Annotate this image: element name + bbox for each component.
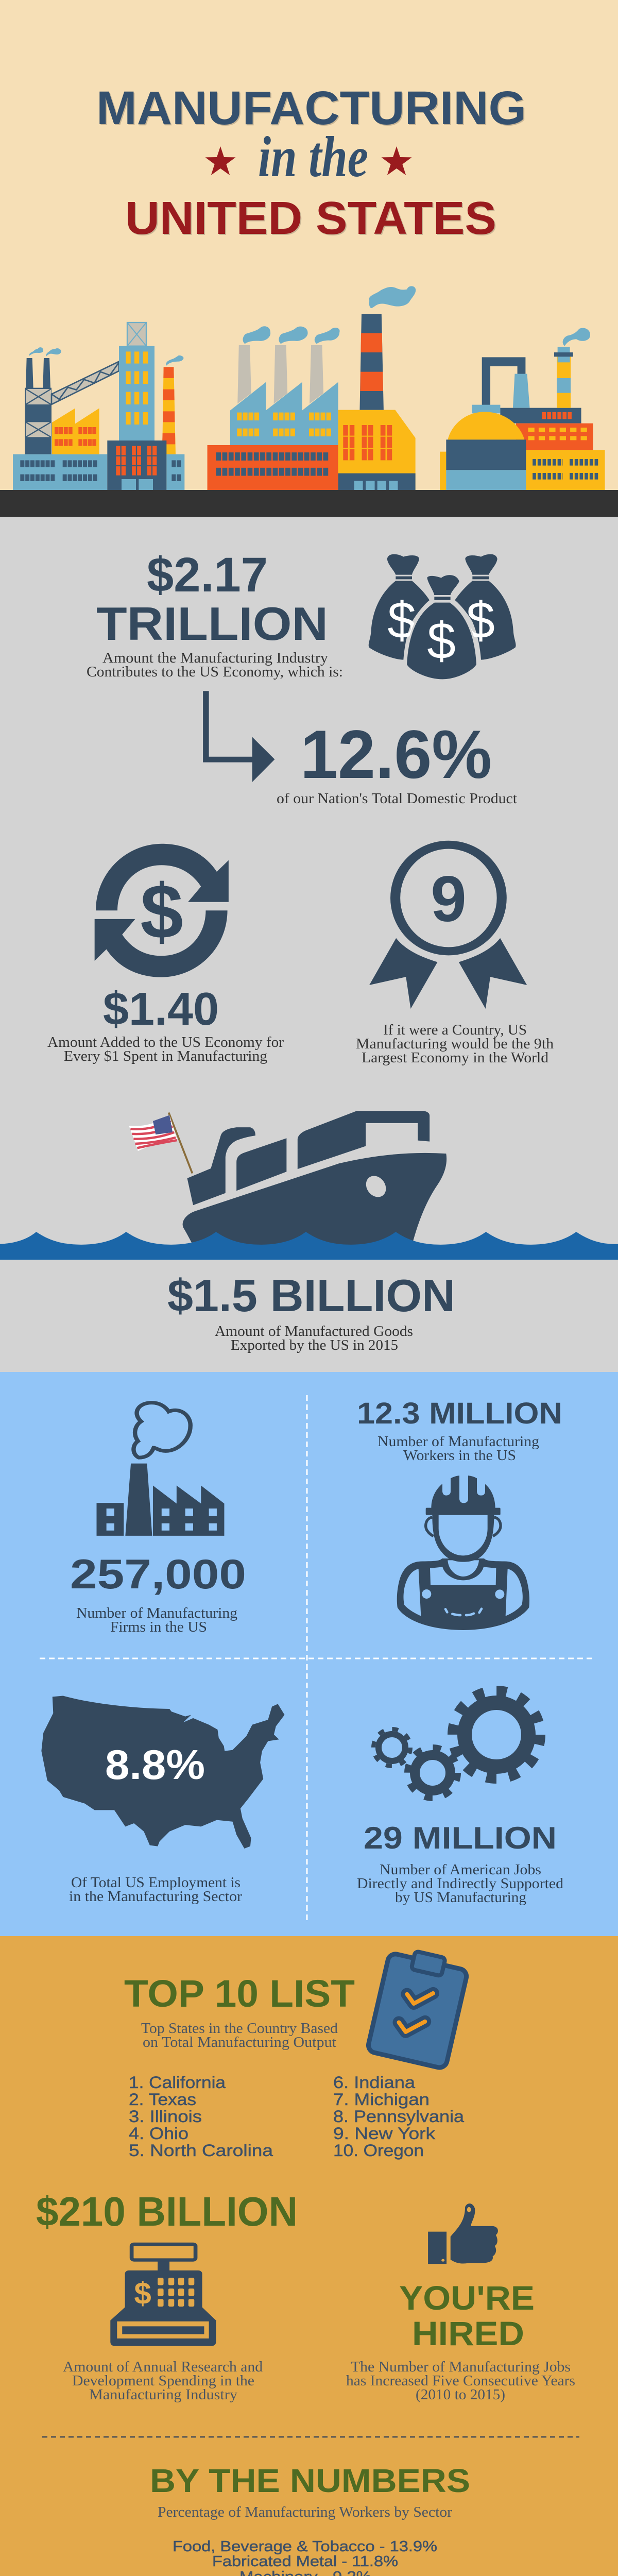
text: research spending: Amount of Annual Research and [63, 2359, 263, 2375]
text: jobs increase [346, 2359, 575, 2403]
icon: ninth place ribbon [369, 845, 527, 1009]
list: states one to five [129, 2073, 273, 2160]
icon: cash register [110, 2244, 216, 2346]
text: ninth largest economy: Manufacturing would be the 9th [356, 1036, 554, 1052]
stat: 1.40: Amount Added to the US Economy for [47, 1034, 284, 1050]
title: UNITED STATES [125, 193, 496, 244]
heading: top 10 list [124, 1972, 355, 2050]
icon: dollar cycle: $ [140, 868, 183, 955]
icon: cash register: $ [134, 2276, 151, 2311]
stat: 29 million jobs: 29 MILLION [364, 1821, 557, 1855]
panel: header [0, 0, 618, 517]
icon: dollar cycle [95, 844, 229, 977]
list: states six to ten: 10. Oregon [333, 2141, 424, 2160]
stat: 2.17 trillion: Amount the Manufacturing Industry [102, 650, 329, 666]
list: workers by sector: Food, Beverage & Tobacco - 13.9% [173, 2538, 437, 2555]
heading: you're hired: HIRED [412, 2314, 524, 2352]
text: jobs increase: The Number of Manufacturing Jobs [351, 2359, 571, 2375]
panel: workforce [0, 1372, 618, 1936]
list: states one to five: 1. California [129, 2073, 226, 2092]
ground bar [0, 490, 618, 517]
text: research spending: Manufacturing Industry [89, 2386, 238, 2403]
stat: 2.17 trillion: $2.17 [147, 548, 268, 602]
illustration: factory two [208, 286, 416, 490]
stat: 1.40 [47, 984, 284, 1064]
heading: you're hired [399, 2279, 535, 2352]
list: states six to ten: 9. New York [333, 2124, 436, 2143]
stat: 29 million jobs [357, 1821, 563, 1906]
title [96, 82, 526, 244]
text: research spending [63, 2359, 263, 2403]
list: states one to five: 5. North Carolina [129, 2141, 273, 2160]
icon: money bags: $ [387, 591, 416, 649]
text: employment share: in the Manufacturing Sector [69, 1888, 242, 1905]
stat: 1.40: Every $1 Spent in Manufacturing [64, 1048, 267, 1064]
icon: factory with smoke [96, 1403, 224, 1536]
stat: 29 million jobs: Number of American Jobs [380, 1861, 541, 1878]
stat: firms: Number of Manufacturing [76, 1605, 237, 1621]
illustration: factory one [13, 323, 184, 490]
text: jobs increase: has Increased Five Consecutive Years [346, 2372, 575, 2389]
text: ninth largest economy: Largest Economy in the World [362, 1049, 548, 1066]
list: workers by sector [152, 2538, 457, 2576]
text: employment share [69, 1874, 242, 1905]
heading: by the numbers: BY THE NUMBERS [150, 2462, 470, 2499]
heading: by the numbers [150, 2462, 470, 2520]
stat: 12.6 percent [277, 717, 517, 807]
stat: firms: 257,000 [70, 1551, 246, 1598]
stat: workers: Workers in the US [403, 1447, 516, 1464]
icon: cargo ship with flag [129, 1111, 447, 1246]
stat: 1.5 billion exports [167, 1270, 455, 1353]
stat: firms: Firms in the US [110, 1619, 207, 1635]
stat: 1.5 billion exports: Amount of Manufactured Goods [215, 1323, 413, 1340]
stat: 29 million jobs: by US Manufacturing [395, 1889, 526, 1906]
stat: 12.6 percent: 12.6% [300, 717, 492, 793]
icon: money bags: $ [466, 591, 495, 649]
icon: money bags [369, 554, 516, 680]
map: United States with 8.8 percent [41, 1696, 285, 1849]
icon: ninth place ribbon: 9 [431, 863, 467, 935]
list: states six to ten: 8. Pennsylvania [333, 2107, 464, 2126]
heading: 210 billion: $210 BILLION [36, 2189, 298, 2234]
stat: 1.5 billion exports: Exported by the US in 2015 [231, 1337, 398, 1353]
text: jobs increase: (2010 to 2015) [416, 2386, 505, 2403]
stat: 29 million jobs: Directly and Indirectly Supported [357, 1875, 563, 1892]
arrow: to 12.6 percent [203, 691, 274, 782]
list: states six to ten [333, 2073, 464, 2160]
list: states one to five: 3. Illinois [129, 2107, 202, 2126]
title: MANUFACTURING [96, 82, 526, 134]
title: in the [258, 125, 368, 189]
stat: 2.17 trillion: TRILLION [96, 598, 328, 650]
list: states one to five: 4. Ohio [129, 2124, 188, 2143]
icon: thumbs up [428, 2204, 498, 2264]
panel: economy [0, 517, 618, 1372]
icon: money bags: $ [427, 612, 456, 670]
list: states six to ten: 6. Indiana [333, 2073, 415, 2092]
stat: 1.5 billion exports: $1.5 BILLION [167, 1270, 455, 1321]
heading: top 10 list: Top States in the Country Based [141, 2020, 338, 2037]
heading: top 10 list: on Total Manufacturing Output [143, 2034, 336, 2050]
heading: by the numbers: Percentage of Manufacturing Workers by Sector [158, 2504, 452, 2520]
icon: gears [373, 1691, 540, 1798]
icon: clipboard [367, 1945, 470, 2069]
stat: 1.40: $1.40 [103, 984, 219, 1035]
text: employment share: Of Total US Employment is [71, 1874, 241, 1891]
stat: 2.17 trillion [87, 548, 343, 680]
stat: firms [70, 1551, 246, 1635]
heading: you're hired: YOU'RE [399, 2279, 535, 2317]
map: United States with 8.8 percent: 8.8% [105, 1742, 205, 1788]
heading: top 10 list: TOP 10 LIST [124, 1972, 355, 2015]
list: states six to ten: 7. Michigan [333, 2090, 430, 2109]
panel: top states and spending [0, 1936, 618, 2576]
stat: 2.17 trillion: Contributes to the US Economy, which is: [87, 664, 343, 680]
stat: workers: 12.3 MILLION [357, 1397, 562, 1430]
waves [0, 1232, 618, 1260]
stat: 12.6 percent: of our Nation's Total Domestic Product [277, 790, 517, 807]
stat: workers: Number of Manufacturing [377, 1433, 539, 1450]
illustration: factory three [440, 328, 605, 490]
icon: worker [397, 1476, 529, 1630]
list: states one to five: 2. Texas [129, 2090, 196, 2109]
text: research spending: Development Spending in the [72, 2372, 254, 2389]
list: workers by sector: Fabricated Metal - 11.8% [212, 2553, 398, 2570]
stat: workers [357, 1397, 562, 1464]
text: ninth largest economy: If it were a Country, US [383, 1022, 527, 1038]
text: ninth largest economy [356, 1022, 554, 1066]
